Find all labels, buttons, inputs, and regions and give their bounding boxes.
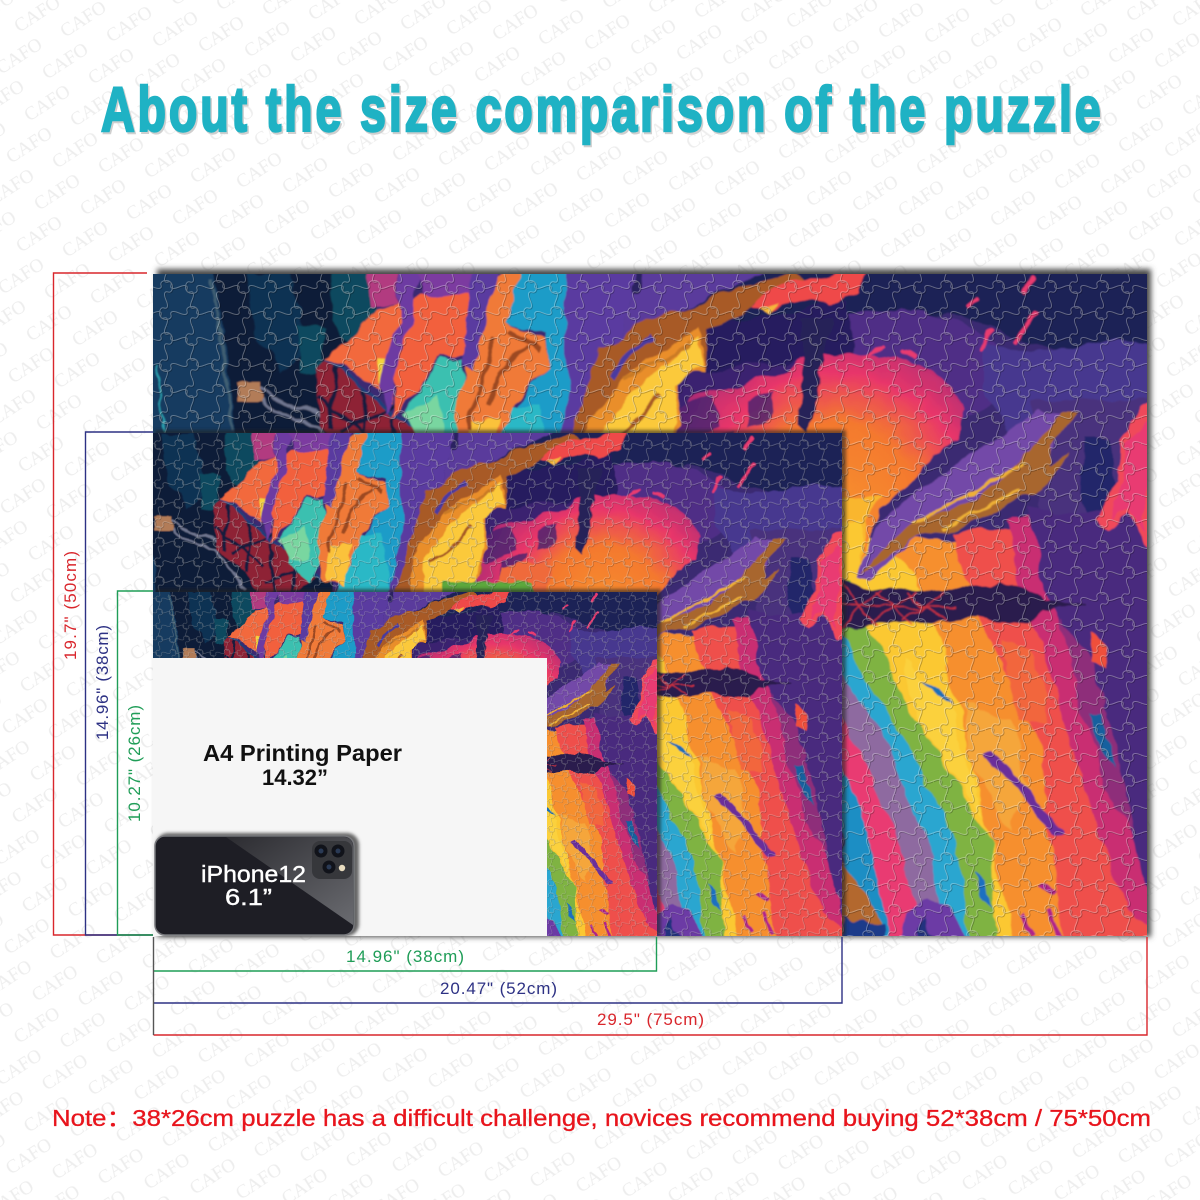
- A4 paper: A4 Printing Paper: [203, 740, 402, 766]
- small puzzle 38x26cm: [153, 592, 657, 936]
- dimension: height 26cm: [118, 591, 153, 935]
- A4 paper: [153, 658, 547, 936]
- dimension: height 38cm: [86, 432, 153, 935]
- dimension: height 50cm: [54, 273, 153, 935]
- medium puzzle 52x38cm: [153, 433, 842, 936]
- dimension: height 26cm: 10.27" (26cm): [125, 705, 144, 822]
- medium puzzle shadow: [155, 430, 846, 936]
- dimension: width 52cm: [154, 937, 842, 1003]
- dimension: width 38cm: [154, 937, 656, 971]
- note: Note：38*26cm puzzle has a difficult challenge, novices recommend buying 52*38cm / 75*50cm: [52, 1105, 1151, 1131]
- puzzle shadow: [157, 269, 1151, 937]
- dimension: height 38cm: 14.96" (38cm): [93, 625, 112, 740]
- dimension: width 75cm: 29.5" (75cm): [597, 1010, 704, 1029]
- dimension: height 50cm: 19.7" (50cm): [61, 551, 80, 660]
- title: About the size comparison of the puzzle: [101, 74, 1101, 145]
- A4 paper: 14.32”: [262, 765, 328, 790]
- iPhone 12: 6.1”: [225, 884, 272, 910]
- iPhone 12: iPhone12: [201, 861, 306, 887]
- small puzzle shadow: [155, 589, 661, 936]
- dimension: width 52cm: 20.47" (52cm): [440, 979, 557, 998]
- dimension: width 75cm: [154, 937, 1147, 1035]
- dimension: width 38cm: 14.96" (38cm): [346, 947, 464, 966]
- iPhone 12: [155, 833, 359, 936]
- large puzzle 75x50cm: [153, 274, 1147, 936]
